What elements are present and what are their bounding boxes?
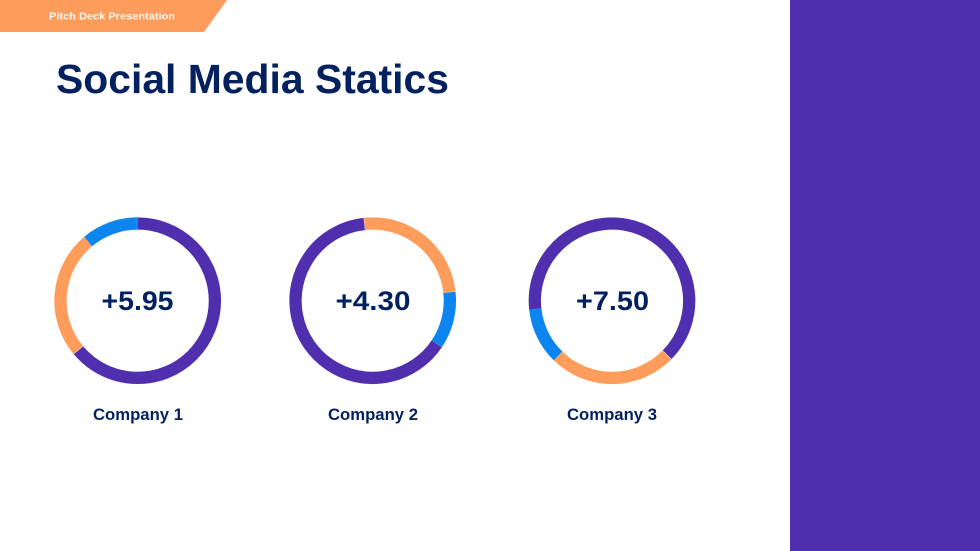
value: company 2: +4.30 xyxy=(336,286,410,316)
value: company 3: +7.50 xyxy=(576,286,649,316)
donut chart: company 2 xyxy=(266,194,480,408)
label: company 2: Company 2 xyxy=(328,406,418,424)
donut chart: company 1 xyxy=(29,192,246,409)
label: company 3: Company 3 xyxy=(567,406,657,424)
panel: company 1 xyxy=(29,192,246,424)
header ribbon xyxy=(0,0,227,32)
header ribbon: Pitch Deck Presentation xyxy=(49,10,175,22)
panel: company 2 xyxy=(266,194,480,424)
title: Social Media Statics xyxy=(56,56,449,102)
panel: company 3 xyxy=(503,192,721,424)
donut chart: company 3 xyxy=(503,192,721,410)
value: company 1: +5.95 xyxy=(102,286,174,316)
purple side panel xyxy=(790,0,980,551)
label: company 1: Company 1 xyxy=(93,406,183,424)
